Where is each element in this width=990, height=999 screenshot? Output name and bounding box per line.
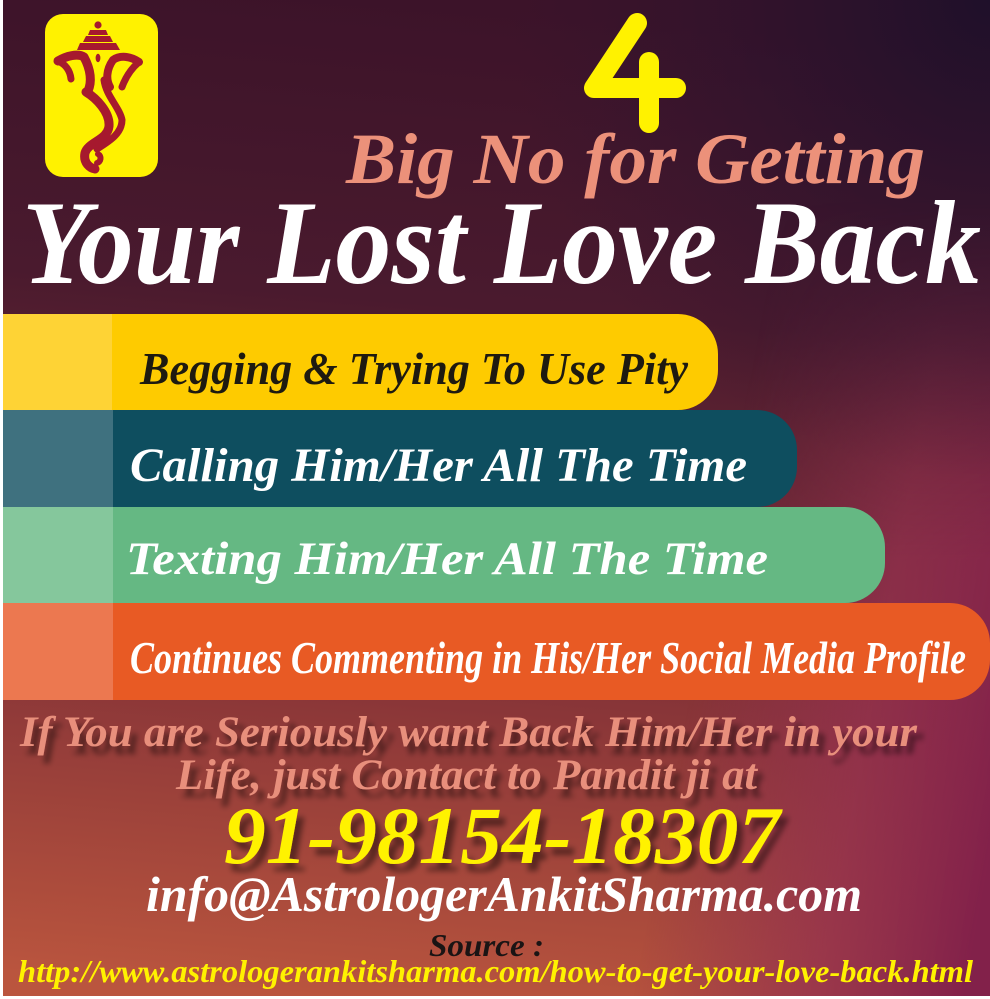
bar 3 label: Texting Him/Her All The Time <box>126 533 768 585</box>
bar 3: Texting <box>3 507 885 603</box>
bar 2: Calling <box>3 410 797 507</box>
source URL: http://www.astrologerankitsharma.com/how-to-get-your-love-back.html <box>18 953 973 989</box>
contact message: Life, just Contact to Pandit ji at <box>175 752 759 799</box>
bar 1: Begging <box>3 314 718 410</box>
number 4 <box>594 23 676 123</box>
bar 4: Commenting <box>3 603 990 700</box>
contact message: If You are Seriously want Back Him/Her in your <box>19 709 918 756</box>
heading: Big No for Getting: Big No for Getting <box>345 119 925 199</box>
email: info@AstrologerAnkitSharma.com <box>146 866 862 922</box>
contact message <box>19 709 918 799</box>
bar 1 label: Begging & Trying To Use Pity <box>139 343 689 394</box>
phone number: 91-98154-18307 <box>224 790 783 881</box>
source label: Source : <box>429 927 544 963</box>
logo: Ganesha icon on yellow tile <box>45 14 158 177</box>
bar 2 label: Calling Him/Her All The Time <box>130 439 747 492</box>
